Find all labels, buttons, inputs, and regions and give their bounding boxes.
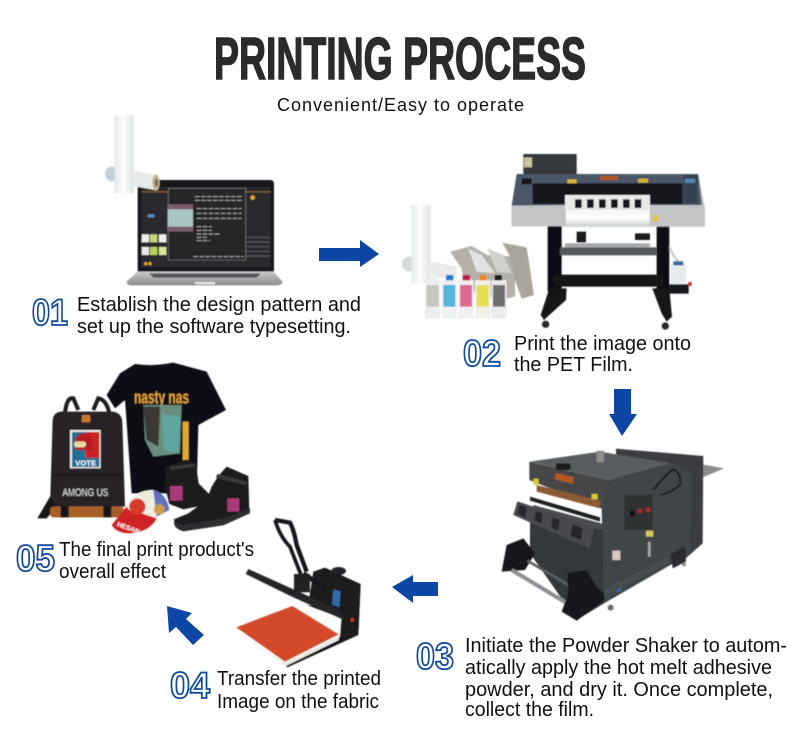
arrow: step 2 to 3 — [609, 389, 637, 436]
arrow: step 3 to 4 — [392, 575, 438, 603]
step 05 text — [59, 539, 254, 583]
step 04 text — [217, 668, 381, 713]
icon: press frame — [246, 520, 361, 667]
step 05 number: 05 — [16, 538, 55, 579]
step 01 text — [77, 294, 361, 338]
step 01 text: set up the software typesetting. — [77, 316, 351, 338]
step 04 illustration: heat press — [235, 520, 361, 667]
step 05 illustration: printed products — [37, 363, 250, 536]
step 03 number: 03 — [416, 636, 454, 677]
step 01 text: Establish the design pattern and — [77, 294, 361, 316]
step 03 text: powder, and dry it. Once complete, — [465, 679, 773, 701]
step 03 text: Initiate the Powder Shaker to autom- — [465, 635, 787, 657]
icon: backpack: VOTE — [75, 458, 96, 467]
title: PRINTING PROCESS — [214, 26, 586, 92]
icon: cap: HESAN — [116, 521, 140, 536]
icon: backpack: AMONG US — [62, 487, 109, 499]
arrow: step 4 to 5 — [167, 606, 204, 645]
step 01 number: 01 — [32, 292, 68, 333]
icon: shaker body — [513, 449, 703, 620]
icon: ink bottles — [425, 275, 507, 319]
icon: DTF printer — [512, 154, 705, 330]
step 05 text: The final print product's — [59, 539, 254, 561]
icon: film roller stand — [502, 538, 686, 621]
icon: cap — [112, 490, 169, 536]
step 01 illustration: laptop and film roll — [105, 115, 283, 285]
step 03 text: collect the film. — [465, 699, 594, 721]
icon: t-shirt: nasty nas — [134, 386, 189, 407]
step 02 text — [514, 333, 691, 376]
step 03 text: atically apply the hot melt adhesive — [465, 657, 772, 679]
icon: laptop — [127, 180, 283, 285]
icon: red platen — [235, 606, 339, 666]
step 02 number: 02 — [463, 333, 501, 374]
icon: film roll — [105, 115, 160, 193]
step 05 text: overall effect — [59, 561, 166, 583]
icon: rear tray — [700, 464, 724, 477]
step 03 text — [465, 635, 787, 721]
arrow: step 1 to 2 — [319, 240, 379, 267]
step 02 text: the PET Film. — [514, 354, 633, 376]
icon: sneakers — [165, 459, 250, 531]
icon: backpack — [37, 398, 125, 518]
step 02 text: Print the image onto — [514, 333, 691, 355]
step 03 illustration: powder shaker — [502, 449, 724, 621]
step 04 number: 04 — [170, 665, 210, 706]
step 04 text: Image on the fabric — [217, 691, 379, 713]
subtitle: Convenient/Easy to operate — [277, 95, 524, 115]
icon: film roll — [402, 205, 457, 283]
icon: ink pouches — [450, 243, 534, 300]
icon: t-shirt — [107, 363, 226, 493]
step 02 illustration: film, inks and printer — [402, 154, 705, 330]
step 04 text: Transfer the printed — [217, 668, 381, 690]
